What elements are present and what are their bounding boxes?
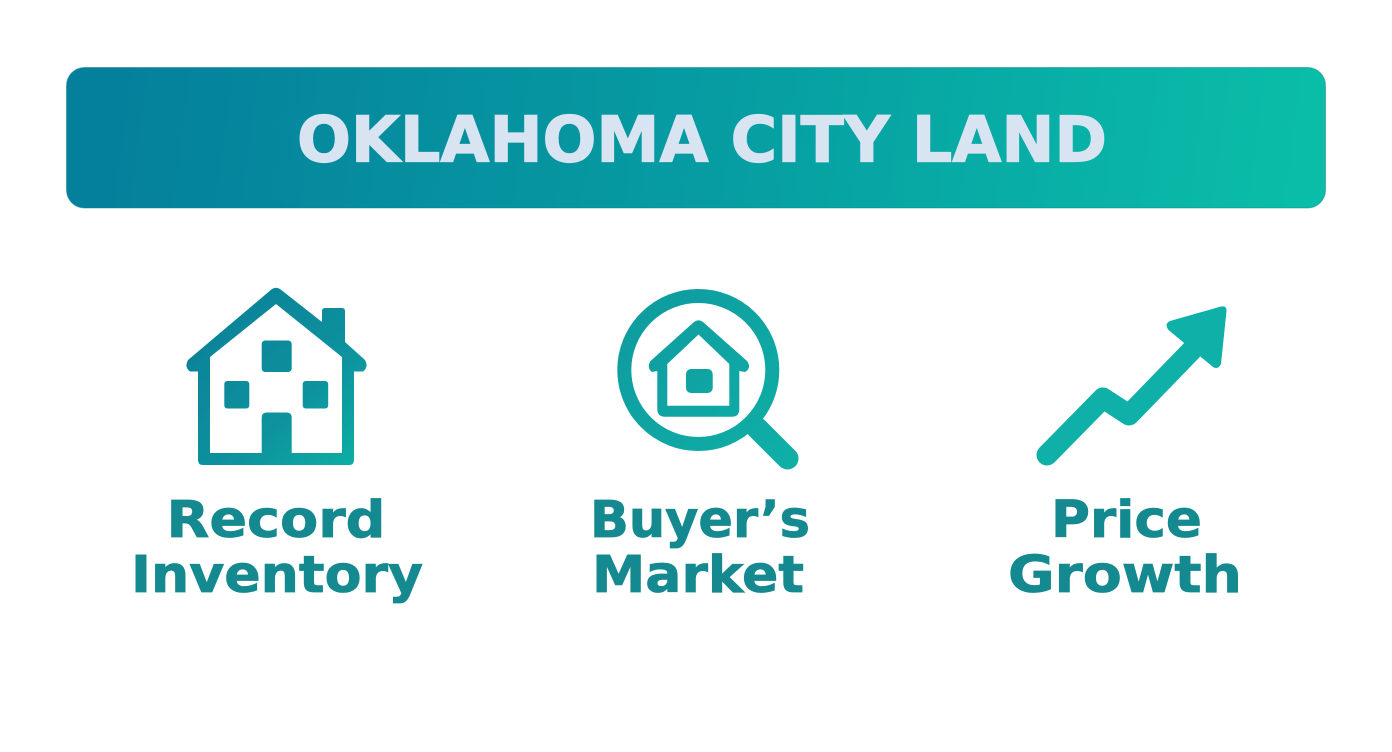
icon: house [186,288,367,465]
label: buyer's market: Buyer’s [590,491,810,550]
icon: rising arrow [1047,306,1227,455]
label: record inventory: Inventory [131,546,423,605]
label: record inventory: Record [166,491,386,550]
label: buyer's market [590,491,810,605]
icon: magnifier with house [624,296,788,458]
title: OKLAHOMA CITY LAND [297,104,1107,176]
label: price growth [1008,491,1242,605]
banner [66,68,1326,208]
item: price growth [1008,306,1242,605]
label: buyer's market: Market [592,546,804,605]
label: price growth: Growth [1008,546,1242,605]
label: record inventory [131,491,423,605]
item: record inventory [131,288,423,605]
label: price growth: Price [1051,491,1202,550]
item: buyer's market [590,296,810,605]
